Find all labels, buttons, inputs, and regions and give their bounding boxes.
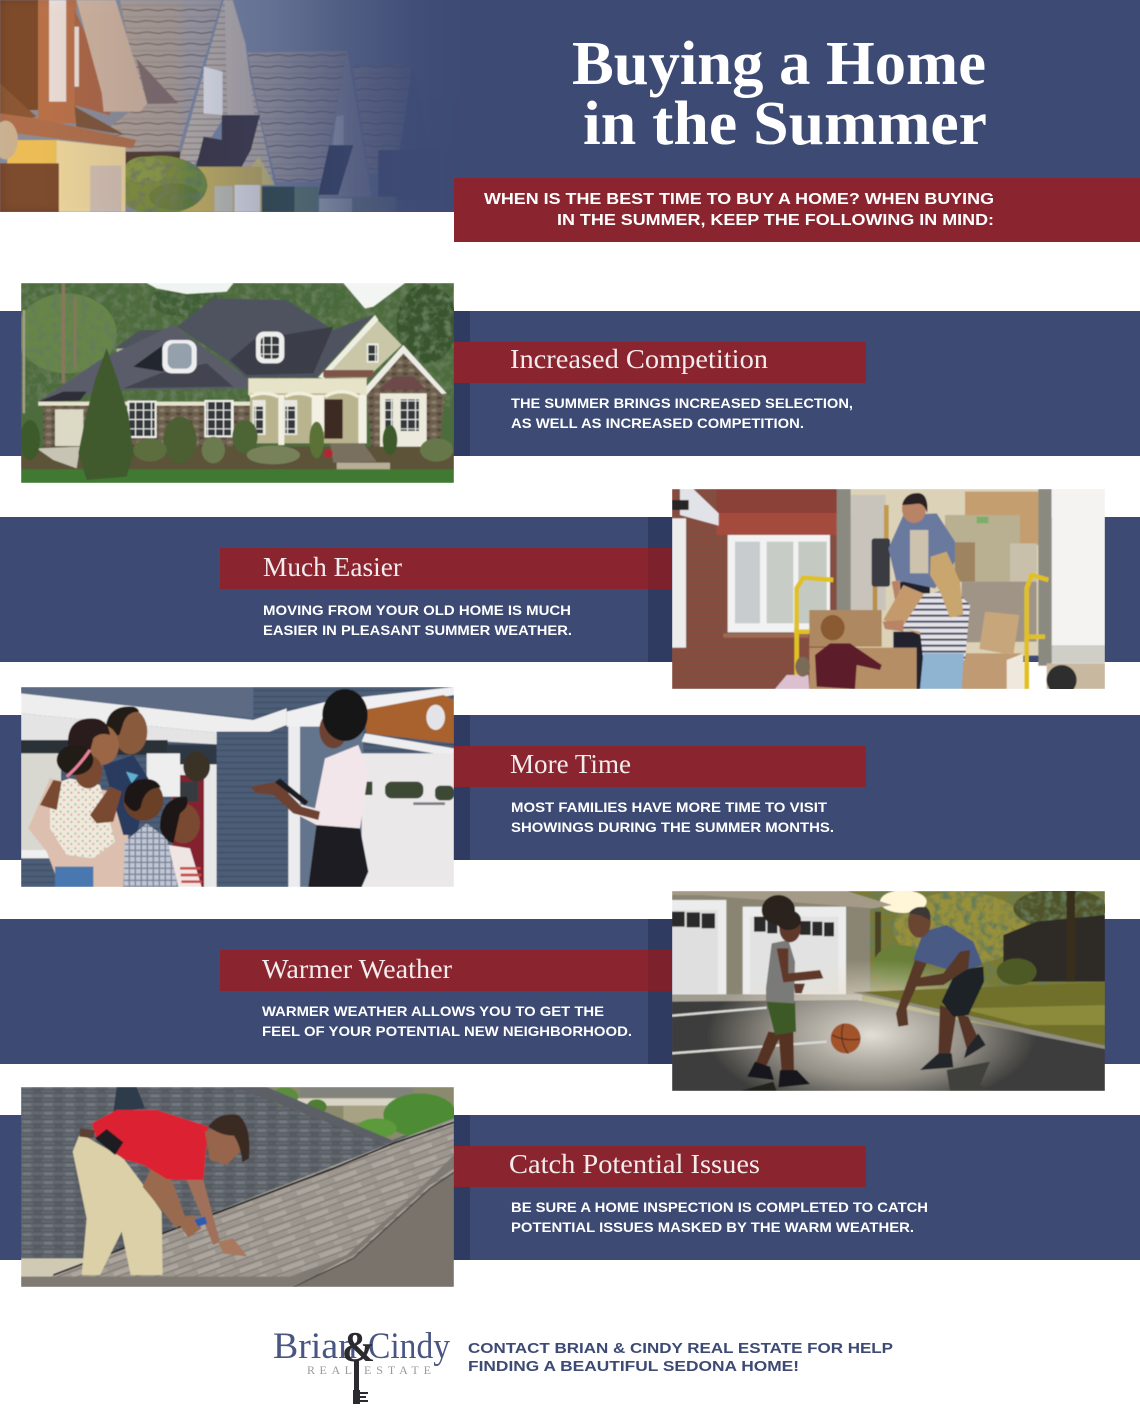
band accent strip bbox=[454, 715, 470, 860]
footer logo: Brian & Cindy Real Estate with key: REAL bbox=[307, 1363, 352, 1377]
panel: warmer weather bbox=[0, 888, 1140, 1091]
band accent strip bbox=[454, 311, 470, 456]
header photo: row of suburban houses fading into navy bbox=[0, 0, 411, 212]
subtitle banner bbox=[454, 178, 1140, 242]
navy band bbox=[0, 517, 1140, 662]
header panel bbox=[0, 0, 1140, 242]
band accent strip bbox=[648, 919, 672, 1064]
description: FEEL OF YOUR POTENTIAL NEW NEIGHBORHOOD. bbox=[262, 1024, 632, 1039]
red heading bar bbox=[454, 342, 866, 383]
description: THE SUMMER BRINGS INCREASED SELECTION, bbox=[511, 396, 853, 411]
footer call to action: CONTACT BRIAN & CINDY REAL ESTATE FOR HELP bbox=[468, 1341, 893, 1357]
description bbox=[262, 1004, 632, 1039]
band accent strip bbox=[648, 517, 672, 662]
navy band bbox=[0, 919, 1140, 1064]
photo: father and daughter playing basketball in driveway bbox=[672, 891, 1105, 1091]
red heading bar bbox=[220, 950, 672, 991]
description: SHOWINGS DURING THE SUMMER MONTHS. bbox=[511, 820, 834, 835]
photo: stone house with grey roof bbox=[21, 283, 454, 483]
red heading bar: More Time bbox=[510, 749, 631, 779]
description bbox=[511, 396, 853, 431]
description bbox=[263, 603, 572, 638]
footer call to action bbox=[468, 1341, 893, 1375]
red heading bar bbox=[454, 746, 866, 787]
panel: increased competition bbox=[0, 283, 1140, 483]
title bbox=[572, 30, 987, 158]
red heading bar bbox=[220, 548, 672, 589]
photo: family unloading moving truck bbox=[672, 489, 1105, 689]
description bbox=[511, 1200, 928, 1235]
description: POTENTIAL ISSUES MASKED BY THE WARM WEATHER. bbox=[511, 1220, 914, 1235]
panel: much easier bbox=[0, 489, 1140, 695]
description: MOVING FROM YOUR OLD HOME IS MUCH bbox=[263, 603, 571, 618]
footer logo: Brian & Cindy Real Estate with key bbox=[273, 1325, 450, 1404]
footer call to action: FINDING A BEAUTIFUL SEDONA HOME! bbox=[468, 1359, 799, 1375]
description bbox=[511, 800, 834, 835]
photo: inspector checking roof shingles bbox=[21, 1087, 454, 1287]
title: in the Summer bbox=[583, 90, 987, 158]
red heading bar: Warmer Weather bbox=[262, 954, 452, 984]
panel: more time bbox=[0, 687, 1140, 887]
navy band bbox=[0, 1115, 1140, 1260]
red heading bar: Much Easier bbox=[263, 552, 402, 582]
band accent strip bbox=[454, 1115, 470, 1260]
subtitle banner: WHEN IS THE BEST TIME TO BUY A HOME? WHEN BUYING bbox=[484, 191, 994, 208]
description: BE SURE A HOME INSPECTION IS COMPLETED TO CATCH bbox=[511, 1200, 928, 1215]
description: EASIER IN PLEASANT SUMMER WEATHER. bbox=[263, 623, 572, 638]
navy band bbox=[0, 715, 1140, 860]
description: WARMER WEATHER ALLOWS YOU TO GET THE bbox=[262, 1004, 604, 1019]
footer logo: Brian & Cindy Real Estate with key: ESTATE bbox=[364, 1363, 431, 1377]
red heading bar: Catch Potential Issues bbox=[509, 1149, 760, 1179]
footer logo: Brian & Cindy Real Estate with key: & bbox=[342, 1325, 375, 1371]
footer logo: Brian & Cindy Real Estate with key: Brian bbox=[273, 1326, 357, 1367]
title: Buying a Home bbox=[572, 30, 986, 98]
description: AS WELL AS INCREASED COMPETITION. bbox=[511, 416, 804, 431]
photo: family meeting a realtor outside a house bbox=[21, 687, 454, 887]
red heading bar: Increased Competition bbox=[510, 344, 769, 374]
description: MOST FAMILIES HAVE MORE TIME TO VISIT bbox=[511, 800, 828, 815]
navy band bbox=[0, 311, 1140, 456]
panel: catch potential issues bbox=[0, 1087, 1140, 1287]
subtitle banner: IN THE SUMMER, KEEP THE FOLLOWING IN MIND: bbox=[557, 212, 994, 229]
header navy background bbox=[0, 0, 1140, 212]
footer logo: Brian & Cindy Real Estate with key: Cindy bbox=[368, 1326, 450, 1367]
red heading bar bbox=[454, 1146, 866, 1187]
